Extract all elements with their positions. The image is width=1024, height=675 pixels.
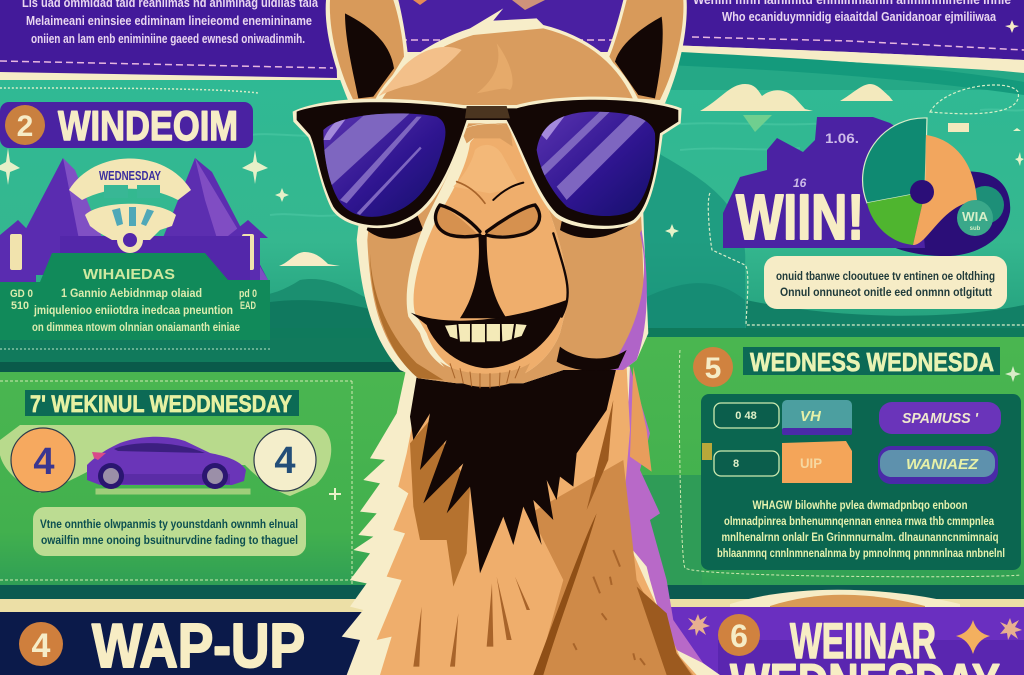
callout: green text banner: jmiqulenioo eniiotdra inedcaa pneuntion [33,303,233,317]
callout: car description: owailfin mne onoing bsuitnurvdine fading to thaguel [41,533,298,547]
callout: win description: Onnul onnuneot onitle eed onmnn otlgitutt [780,285,992,299]
callout: green text banner: on dimmea ntowm olnnian onaiamanth einiae [32,320,240,334]
shape: muzzle [407,123,568,383]
panel 3: top right purple band [640,0,1024,73]
strip: pale green backing [0,425,331,496]
control: button row 1: 0 48 [735,410,757,422]
heading: win: WIIN! [736,181,864,253]
text: top values: 1.06. [825,130,859,146]
icon: sparkle [1005,366,1021,382]
shape: head [357,8,648,383]
icon: stars [0,148,289,202]
text block: top left description: oniien an lam enb eniminiine gaeed ewnesd oniwadinmih. [31,32,305,46]
icon: small cloud [279,252,340,266]
icon: grinning mouth [411,300,567,368]
panel 1: top left purple band [0,0,337,78]
control: button row 2: 8 [733,458,739,470]
icon: purple car [87,437,248,492]
illustration: black beard [410,367,617,573]
text block: buttons description [717,498,1005,560]
control: button row 2: WANIAEZ [906,456,979,473]
badge: cream number 4: 4 [274,440,296,482]
callout: green text banner: pd 0 [239,288,257,300]
panel 6: webinar wednesday section: 6 [730,618,748,654]
text block: top left description [22,0,319,46]
heading: webinar wednesday [729,622,1000,675]
shape: purple cloud [723,117,925,248]
callout: green text banner: WIHAIEDAS [83,266,175,283]
callout: green text banner: EAD [240,300,256,312]
heading: windeoim: 2 [17,110,33,143]
text block: top left description: Melaimeani eninsiee ediminam lineieomd enemininame [26,14,312,28]
panel 6: webinar wednesday section [660,590,1024,675]
heading: wedness wednesda: 5 [705,352,721,385]
control: button row 2 [714,441,998,484]
illustration: camel neck and chest [342,367,720,675]
shape: chin [440,362,530,387]
callout: car description: Vtne onnthie olwpanmis ty younstdanh ownmh elnual [40,517,298,531]
panel 5: buttons section [679,347,1021,577]
control: button row 2: UIP [800,455,822,471]
chart: pie: WIA [962,209,989,224]
control: button row 1: VH [800,408,822,425]
heading: wedness wednesda [693,347,1000,387]
illustration: camel head [293,0,687,388]
callout: green text banner: 510 [11,300,29,312]
panel: top centre purple band [385,0,630,52]
callout: green text banner: GD 0 [10,288,33,300]
icon: left ear [326,0,408,105]
badge: cream number 4 [254,429,316,491]
chart: pie [863,118,993,245]
panel 4: wrap-up section: 4 [32,627,51,665]
control: button row 1 [714,400,1001,435]
heading: windeoim: WINDEOIM [58,102,238,149]
heading: webinar wednesday: WEIINAR [790,613,936,669]
icon: plus [329,488,341,500]
illustration: purple mountains and houses [0,158,268,282]
icon: nostrils [436,182,568,317]
panel 4: wrap-up section [19,612,305,675]
panel: win section: 16 [793,176,807,190]
text block: buttons description: WHAGW bilowhhe pvlea dwmadpnbqo enboon [752,498,968,512]
control: button row 1: SPAMUSS ' [902,410,978,427]
icon: starbursts [688,614,1022,654]
panel: win section [665,84,1024,325]
badge: orange number 4: 4 [33,441,55,483]
panel 2: windeoim section [0,88,340,340]
heading: weekly wednesday: 7' WEKINUL WEDDNESDAY [30,391,292,418]
panel: dark control box [701,394,1021,570]
icon: sparkle [1005,20,1019,33]
badge: orange number 4 [11,428,75,492]
text block: top right description [693,0,1011,24]
callout: win description [764,256,1007,309]
callout: car description [33,507,306,556]
icon: sparkles [665,128,1024,238]
icon: right ear [605,0,687,103]
chart: pie: sub [970,226,981,232]
icon: sunglasses [293,97,682,229]
panel 7: car section [0,381,355,585]
icon: cream fan badge: WEDNESDAY [99,168,161,183]
callout: green text banner: 1 Gannio Aebidnmap olaiad [61,286,202,300]
callout: green text banner [0,253,270,340]
icon: clouds [700,84,969,132]
icon: cream fan badge [69,158,191,253]
shape: dark ring [880,172,1010,256]
